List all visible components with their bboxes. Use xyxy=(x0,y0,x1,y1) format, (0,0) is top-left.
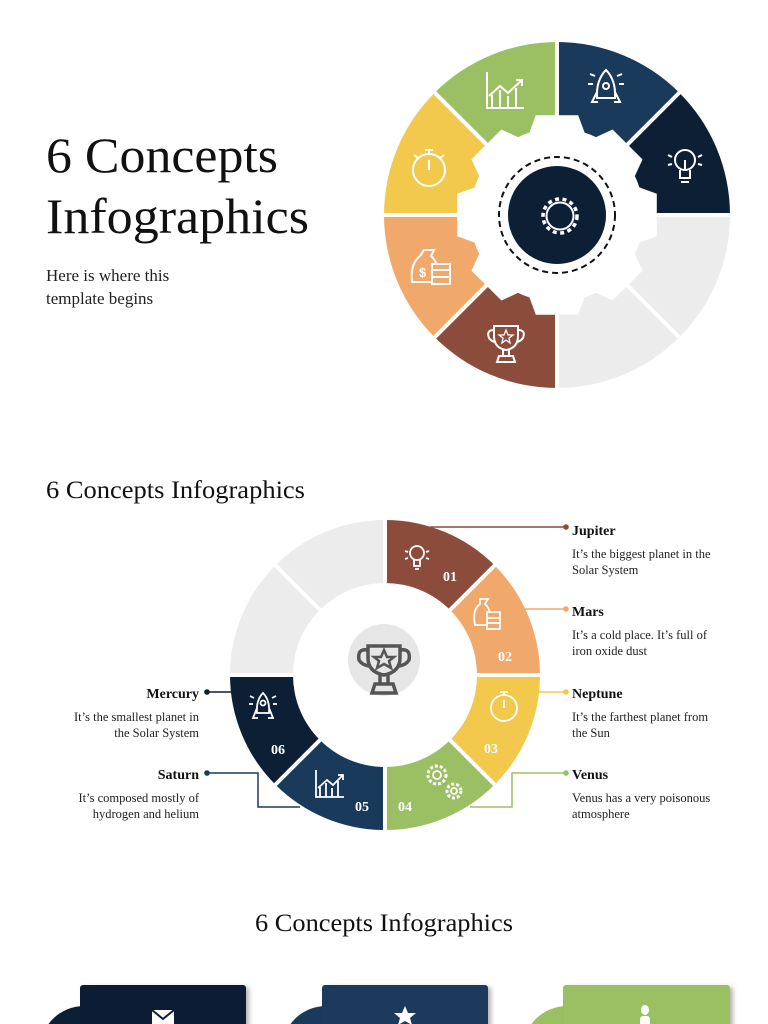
callout: Jupiter: Jupiter xyxy=(572,524,616,539)
center trophy icon xyxy=(348,624,420,696)
callout: Saturn: It’s composed mostly of xyxy=(79,791,200,805)
heading: section 2: 6 Concepts Infographics xyxy=(46,477,305,504)
segment labels: 05 xyxy=(355,800,369,815)
title xyxy=(46,127,309,244)
subtitle: template begins xyxy=(46,289,153,308)
subtitle: Here is where this xyxy=(46,266,169,285)
icon: money xyxy=(412,250,450,284)
callout: Saturn xyxy=(79,768,200,821)
callout: Jupiter: It’s the biggest planet in the xyxy=(572,547,711,561)
callout: Mercury xyxy=(74,687,200,740)
callout: Venus xyxy=(572,768,710,821)
white gear xyxy=(457,115,657,315)
callout: Mercury: the Solar System xyxy=(114,726,199,740)
callout: Saturn: Saturn xyxy=(158,768,199,783)
card 1 xyxy=(40,985,246,1024)
callout: Mars: iron oxide dust xyxy=(572,644,648,658)
segment labels: 02 xyxy=(498,650,512,665)
card 2 xyxy=(282,985,488,1024)
center dark circle xyxy=(499,157,615,273)
segment labels xyxy=(271,570,512,815)
card 3 xyxy=(523,985,730,1024)
callout: Mercury: Mercury xyxy=(146,687,199,702)
callout: Venus: Venus xyxy=(572,768,609,783)
callout: Neptune: Neptune xyxy=(572,687,623,702)
segment labels: 06 xyxy=(271,743,285,758)
icon: trophy xyxy=(488,326,524,362)
callout: Jupiter: Solar System xyxy=(572,563,639,577)
connector lines xyxy=(204,524,569,807)
callout: Mercury: It’s the smallest planet in xyxy=(74,710,200,724)
callout: Neptune: It’s the farthest planet from xyxy=(572,710,708,724)
title: Infographics xyxy=(46,188,309,244)
icon: bulb xyxy=(668,150,702,182)
callout: Mars: Mars xyxy=(572,605,604,620)
callout: Neptune xyxy=(572,687,708,740)
title: 6 Concepts xyxy=(46,127,278,183)
callout: Neptune: the Sun xyxy=(572,726,611,740)
gear wheel chart xyxy=(382,40,732,390)
callout: Jupiter xyxy=(572,524,711,577)
icon: rocket xyxy=(588,70,624,102)
donut chart xyxy=(228,518,542,832)
callout: Venus: Venus has a very poisonous xyxy=(572,791,710,805)
segment labels: 03 xyxy=(484,742,498,757)
subtitle xyxy=(46,266,169,308)
callout: Venus: atmosphere xyxy=(572,807,630,821)
heading: section 3: 6 Concepts Infographics xyxy=(255,910,513,937)
segment labels: 04 xyxy=(398,800,412,815)
icon: money: $ xyxy=(419,265,427,280)
segment labels: 01 xyxy=(443,570,457,585)
icon: chart xyxy=(487,72,524,108)
callout: Saturn: hydrogen and helium xyxy=(93,807,199,821)
segment icons xyxy=(249,546,517,798)
callout: Mars: It’s a cold place. It’s full of xyxy=(572,628,708,642)
icon: stopwatch xyxy=(413,150,445,186)
callout: Mars xyxy=(572,605,708,658)
